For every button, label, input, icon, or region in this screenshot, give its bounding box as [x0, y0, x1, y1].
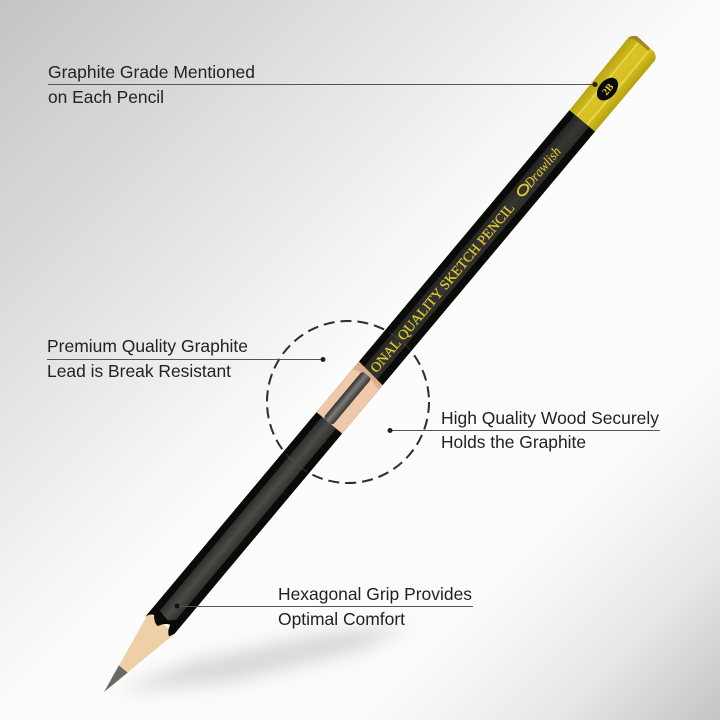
centre facet, upper — [362, 115, 589, 380]
brand logo: Drawlish — [522, 145, 565, 192]
wood end shading — [352, 362, 385, 391]
grade badge — [593, 74, 622, 105]
callout: hexagonal grip — [174, 584, 473, 629]
grade badge: 2B — [600, 81, 616, 98]
pencil — [90, 33, 660, 703]
imprint text: ONAL QUALITY SKETCH PENCIL — [368, 201, 518, 376]
centre facet, lower — [158, 416, 337, 624]
graphite tip — [100, 665, 128, 696]
cap end — [628, 33, 651, 53]
black body — [145, 110, 595, 638]
callout: premium graphite — [47, 336, 326, 381]
callout: graphite grade — [48, 62, 598, 107]
callout: premium graphite: Premium Quality Graphite — [47, 336, 248, 356]
gold cap — [568, 33, 660, 132]
callout: wood — [388, 408, 660, 452]
exposed graphite core — [323, 371, 372, 425]
faint circle over pencil — [267, 321, 429, 483]
callout: hexagonal grip: Hexagonal Grip Provides — [278, 584, 472, 604]
brand logo — [515, 145, 565, 200]
callout: premium graphite: Lead is Break Resistant — [47, 361, 231, 381]
callout: wood: High Quality Wood Securely — [441, 408, 659, 428]
callout: graphite grade: on Each Pencil — [48, 87, 164, 107]
dashed magnifier circle — [267, 321, 429, 483]
pencil shadow — [115, 625, 410, 692]
callout: graphite grade: Graphite Grade Mentioned — [48, 62, 255, 82]
callout: hexagonal grip: Optimal Comfort — [278, 609, 405, 629]
wood cone — [91, 612, 175, 703]
exposed wood cutaway — [317, 362, 385, 434]
callout: wood: Holds the Graphite — [441, 432, 586, 452]
